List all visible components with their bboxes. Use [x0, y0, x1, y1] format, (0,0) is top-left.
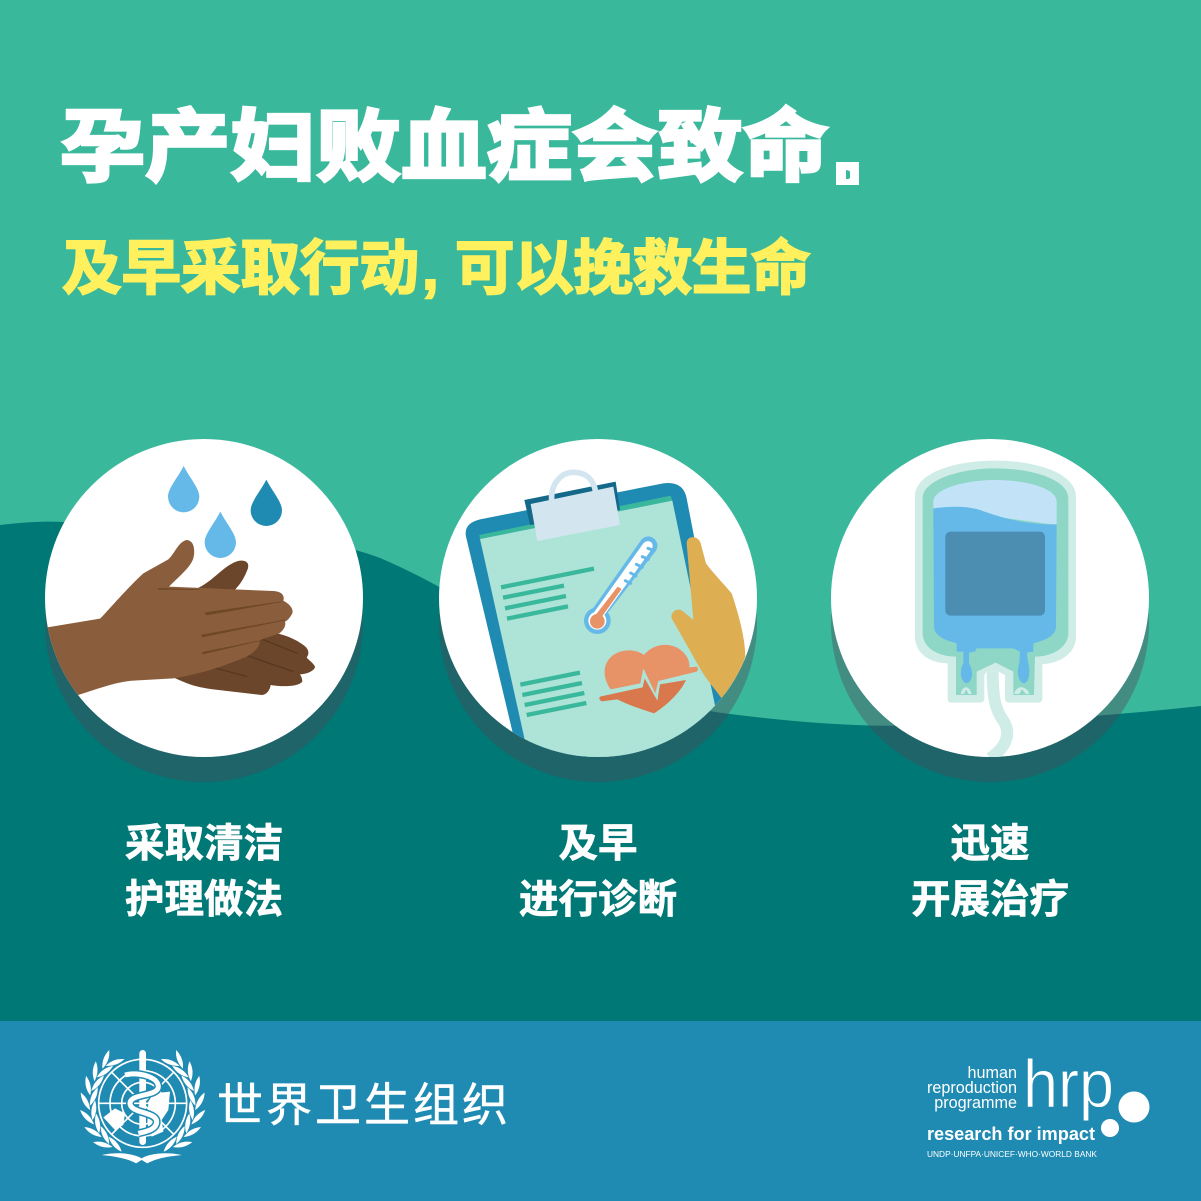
organisation name: 世界卫生组织	[217, 1079, 511, 1131]
icon: clipboard	[466, 472, 745, 763]
footer band	[0, 1021, 1201, 1201]
text lines	[501, 569, 594, 715]
partners: UNDP·UNFPA·UNICEF·WHO·WORLD BANK	[927, 1149, 1097, 1159]
left laurel	[78, 1049, 125, 1153]
panel: early diagnosis	[439, 439, 757, 922]
subtitle: ,	[422, 235, 439, 302]
clip	[524, 472, 620, 541]
rear hand	[173, 561, 315, 695]
logo: HRP: programme	[934, 1094, 1017, 1112]
title: 孕产妇败血症会致命	[60, 104, 828, 191]
icon: holding hand	[671, 537, 745, 698]
label: 进行诊断	[519, 878, 677, 922]
circle shadow	[45, 464, 363, 782]
front hand	[43, 540, 293, 700]
logo: HRP: human	[968, 1064, 1017, 1082]
white circle	[45, 439, 363, 757]
label	[911, 822, 1069, 922]
dark teal wave	[0, 522, 1201, 1030]
subtitle	[62, 235, 810, 302]
panel: clean care	[43, 439, 363, 922]
staff and snake	[125, 1050, 158, 1145]
continents	[103, 1092, 170, 1137]
logo: HRP	[927, 1046, 1150, 1159]
label	[519, 822, 677, 922]
hrp wordmark: hrp	[1023, 1046, 1114, 1122]
circle shadow	[831, 464, 1149, 782]
title full stop: 。	[837, 134, 887, 190]
globe	[99, 1059, 187, 1147]
label: 及早	[558, 822, 638, 866]
icon: water drops	[168, 466, 282, 558]
icon: IV bag	[915, 461, 1076, 758]
white circle	[831, 439, 1149, 757]
logo: WHO emblem	[78, 1049, 207, 1163]
white circle	[439, 439, 757, 757]
label	[125, 822, 283, 922]
right laurel	[160, 1049, 207, 1153]
label: 开展治疗	[911, 878, 1069, 922]
tagline: research for impact	[927, 1124, 1095, 1144]
icon: heart with pulse	[599, 645, 698, 713]
dots	[1118, 1092, 1150, 1122]
panel: rapid treatment	[831, 439, 1149, 922]
label: 护理做法	[125, 878, 283, 922]
subtitle: 及早采取行动	[62, 235, 419, 302]
label: 迅速	[950, 822, 1030, 866]
label: 采取清洁	[125, 822, 283, 866]
subtitle: 可以挽救生命	[455, 235, 810, 302]
logo: HRP: reproduction	[927, 1079, 1017, 1097]
circle shadow	[439, 464, 757, 782]
icon: washing hands and water drops	[43, 466, 315, 700]
icon: thermometer	[584, 536, 657, 634]
ribbon	[102, 1153, 182, 1163]
